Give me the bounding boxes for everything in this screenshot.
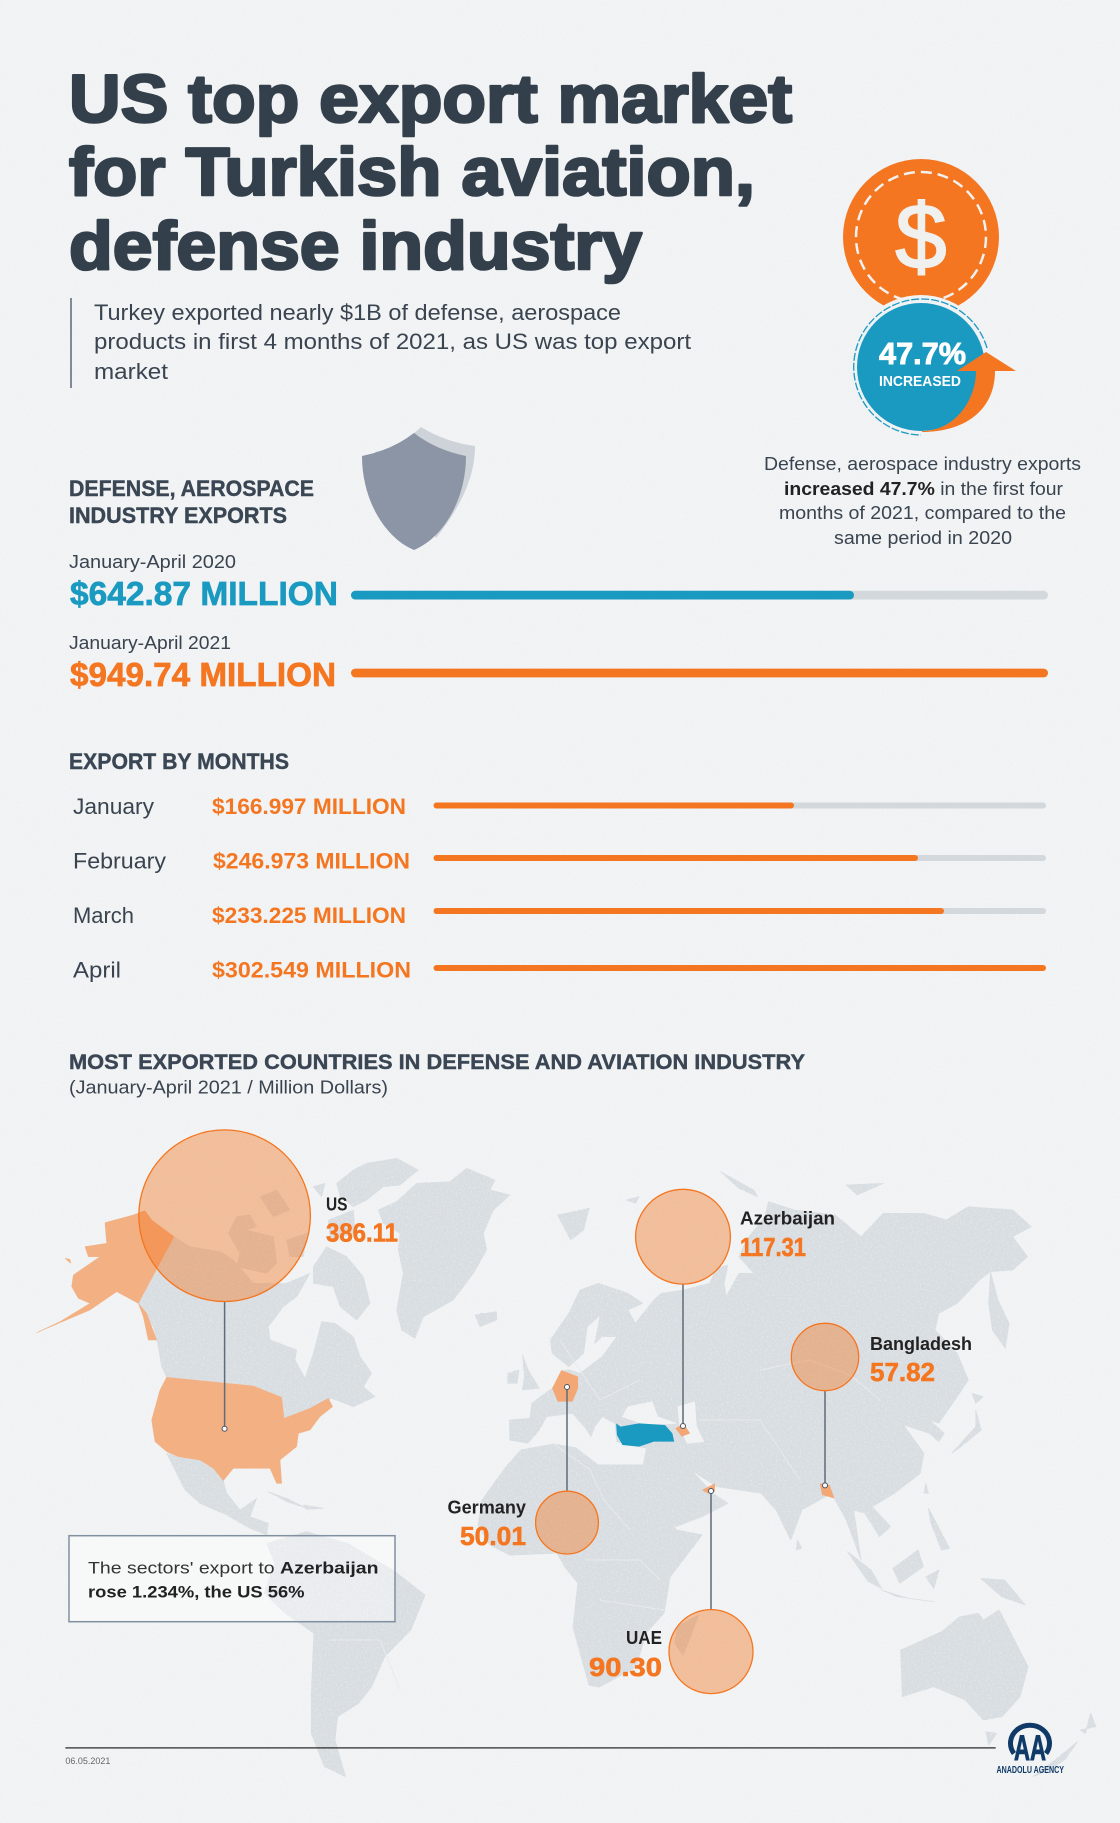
bar: January-April 2021: January-April 2021 [69, 633, 231, 653]
icon: dollar coin: $ [895, 186, 947, 288]
callout box: export rise [69, 1536, 395, 1622]
subtitle with side rule: Turkey exported nearly $1B of defense, aerospace [94, 300, 621, 325]
map: country borders [330, 1340, 880, 1690]
bar: April [73, 958, 1046, 982]
callout: Germany [448, 1384, 598, 1554]
callout: US [139, 1130, 398, 1431]
icon: dollar coin [843, 159, 999, 315]
map: south-east asia and oceania [675, 1508, 1096, 1777]
map: highlighted US and Alaska [37, 1211, 333, 1483]
bar: March: March [73, 903, 134, 928]
logo: Anadolu Agency: ANADOLU AGENCY [996, 1765, 1064, 1776]
world map [138, 1158, 1096, 1777]
bar: January-April 2021: $949.74 MILLION [70, 656, 336, 693]
footer rule [65, 1747, 996, 1748]
callout: Azerbaijan: Azerbaijan [740, 1208, 835, 1228]
logo: Anadolu Agency [996, 1725, 1064, 1776]
map: eurasia [480, 1172, 1031, 1560]
callout: UAE: 90.30 [589, 1652, 662, 1682]
text: increase explanation: same period in 2020 [834, 528, 1012, 548]
bar: February [73, 848, 1046, 874]
title [69, 61, 792, 284]
bar: March [73, 903, 1046, 928]
callout: Germany: Germany [448, 1498, 526, 1518]
bar: April: April [73, 958, 121, 982]
map: Turkey [616, 1423, 674, 1447]
bar: January-April 2020 [69, 552, 1048, 612]
callout: Bangladesh [791, 1323, 972, 1488]
icon: increase badge with arrow: 47.7% [879, 336, 966, 371]
subtitle with side rule [70, 298, 691, 388]
map: south america [264, 1532, 425, 1777]
heading: defense, aerospace industry exports: INDUSTRY EXPORTS [69, 503, 287, 528]
bar: January [73, 794, 1046, 819]
bar: January-April 2020: $642.87 MILLION [70, 575, 338, 612]
text: increase explanation [764, 454, 1081, 548]
date: 06.05.2021 [65, 1756, 110, 1766]
bar: January-April 2021 [69, 633, 1048, 693]
logo: Anadolu Agency: AA [1014, 1729, 1046, 1768]
heading: defense, aerospace industry exports: DEFENSE, AEROSPACE [69, 476, 314, 501]
highlighted countries [37, 1211, 834, 1498]
callout box: export rise: The sectors' export to Azerbaijan [88, 1558, 378, 1578]
icon: increase badge with arrow: INCREASED [879, 373, 961, 390]
callout: Azerbaijan: 117.31 [740, 1232, 806, 1262]
heading: export by months: EXPORT BY MONTHS [69, 749, 289, 774]
title: defense industry [69, 208, 642, 284]
callout: Germany: 50.01 [460, 1521, 526, 1551]
title: US top export market [69, 61, 792, 137]
heading: most exported countries [69, 1051, 805, 1098]
map: africa [478, 1444, 702, 1687]
callout: Bangladesh: Bangladesh [870, 1334, 972, 1354]
callout box: export rise: rose 1.234%, the US 56% [88, 1582, 304, 1602]
callout: Bangladesh: 57.82 [870, 1357, 935, 1387]
heading: defense, aerospace industry exports [69, 476, 314, 528]
callout: US: 386.11 [326, 1218, 398, 1248]
bar: February: $246.973 MILLION [213, 848, 410, 874]
callout: UAE: UAE [626, 1628, 662, 1648]
icon: increase badge with arrow [849, 295, 1016, 439]
bar: March: $233.225 MILLION [212, 903, 406, 928]
bar: January-April 2020: January-April 2020 [69, 552, 236, 572]
bar: April: $302.549 MILLION [212, 958, 411, 982]
text: increase explanation: increased 47.7% in the first four [784, 479, 1063, 499]
bar: February: February [73, 848, 166, 874]
icon: shield [362, 427, 475, 550]
map: north america and greenland [138, 1158, 510, 1535]
callout: Azerbaijan [636, 1189, 835, 1428]
text: increase explanation: months of 2021, compared to the [779, 503, 1066, 523]
heading: most exported countries: (January-April 2021 / Million Dollars) [69, 1078, 388, 1098]
title: for Turkish aviation, [69, 134, 755, 210]
subtitle with side rule: market [94, 359, 168, 384]
inland seas [622, 1402, 704, 1443]
subtitle with side rule: products in first 4 months of 2021, as US was top export [94, 329, 691, 354]
bar: January: January [73, 794, 154, 819]
bar: January: $166.997 MILLION [212, 794, 406, 819]
text: increase explanation: Defense, aerospace industry exports [764, 454, 1081, 474]
callout: US: US [326, 1194, 348, 1214]
heading: most exported countries: MOST EXPORTED COUNTRIES IN DEFENSE AND AVIATION INDUSTRY [69, 1051, 805, 1074]
callout: UAE [589, 1488, 753, 1694]
map: highlighted Germany, Azerbaijan, UAE, Bangladesh [552, 1370, 834, 1498]
